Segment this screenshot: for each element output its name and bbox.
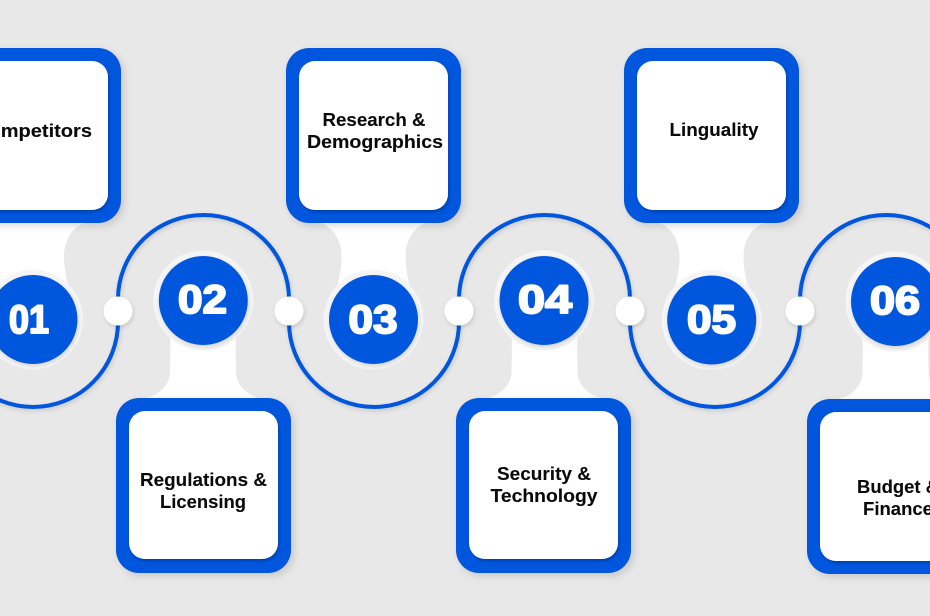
card: Budget & Finance — [807, 399, 930, 574]
step 05 badge: 05 — [687, 298, 736, 342]
card: Competitors — [0, 48, 121, 223]
card: Research & Demographics — [286, 48, 461, 223]
step 04 badge: 04 — [518, 278, 573, 322]
step 02 badge: 02 — [178, 278, 227, 322]
step 06 badge — [846, 252, 930, 352]
card: Linguality: Linguality — [670, 120, 758, 140]
card: Regulations & Licensing: Regulations & — [140, 470, 267, 490]
step 03 badge — [324, 270, 424, 370]
card: Research & Demographics: Demographics — [307, 132, 443, 152]
step 04 badge — [494, 250, 594, 350]
card: Regulations & Licensing: Licensing — [160, 492, 246, 512]
card: Research & Demographics: Research & — [322, 110, 426, 130]
step 01 badge — [0, 270, 83, 370]
connector necks — [0, 223, 930, 399]
card: Budget & Finance: Finance — [863, 499, 930, 519]
step 05 badge — [662, 270, 762, 370]
card: Linguality — [624, 48, 799, 223]
step 03 badge: 03 — [348, 298, 398, 342]
card: Security & Technology — [456, 398, 631, 573]
step 01 badge: 01 — [9, 298, 49, 342]
step 02 badge — [153, 250, 253, 350]
step 06 badge: 06 — [870, 279, 920, 323]
connector nodes — [104, 296, 814, 326]
timeline arcs — [0, 215, 930, 407]
card: Regulations & Licensing — [116, 398, 291, 573]
card: Security & Technology: Technology — [490, 486, 598, 506]
card: Security & Technology: Security & — [497, 464, 591, 484]
